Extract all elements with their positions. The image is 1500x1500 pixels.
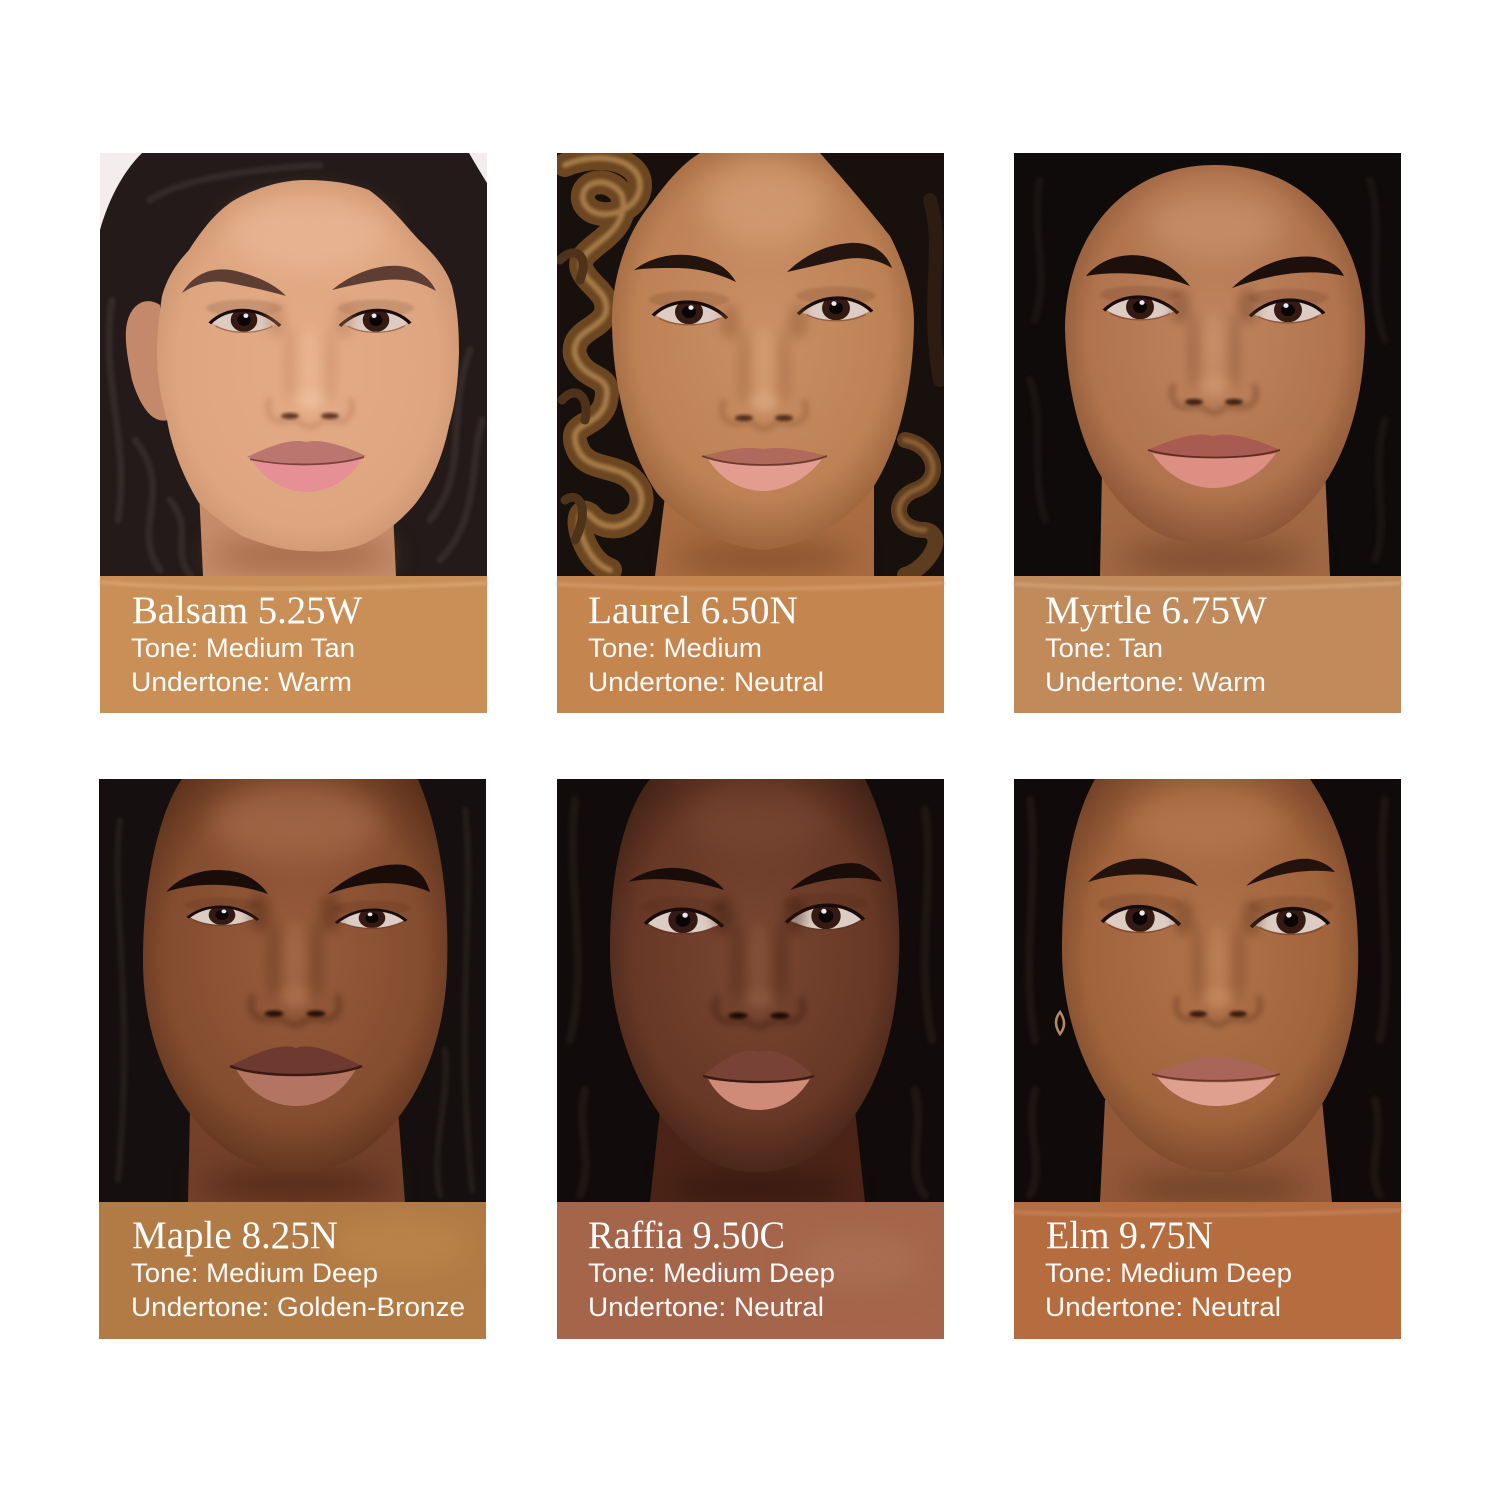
- undertone: Undertone: Golden-Bronze: [131, 1292, 465, 1322]
- swatch: Laurel: [557, 576, 944, 713]
- swatch: Maple: [99, 1202, 486, 1339]
- shade name: Elm 9.75N: [1046, 1214, 1213, 1257]
- shade name: Maple 8.25N: [132, 1214, 338, 1257]
- shade name: Myrtle 6.75W: [1045, 589, 1267, 632]
- shade name: Laurel 6.50N: [588, 589, 798, 632]
- portrait: Elm: [1014, 779, 1401, 1202]
- tone: Tone: Medium: [588, 633, 762, 663]
- panel: Laurel 6.50N: [557, 153, 944, 713]
- undertone: Undertone: Warm: [1045, 667, 1266, 697]
- panel: Myrtle 6.75W: [1014, 153, 1401, 713]
- undertone: Undertone: Neutral: [588, 667, 824, 697]
- panel: Raffia 9.50C: [557, 779, 944, 1339]
- swatch: Raffia: [557, 1202, 944, 1339]
- undertone: Undertone: Neutral: [1045, 1292, 1281, 1322]
- swatch: Elm: [1014, 1202, 1401, 1339]
- undertone: Undertone: Neutral: [588, 1292, 824, 1322]
- tone: Tone: Medium Tan: [131, 633, 355, 663]
- tone: Tone: Medium Deep: [588, 1258, 835, 1288]
- panel: Elm 9.75N: [1014, 779, 1401, 1339]
- portrait: Balsam: [100, 153, 487, 576]
- undertone: Undertone: Warm: [131, 667, 352, 697]
- portrait: Raffia: [557, 779, 944, 1202]
- swatch: Myrtle: [1014, 576, 1401, 713]
- tone: Tone: Medium Deep: [131, 1258, 378, 1288]
- shade name: Raffia 9.50C: [588, 1214, 785, 1257]
- portrait: Maple: [99, 779, 486, 1202]
- tone: Tone: Tan: [1045, 633, 1163, 663]
- portrait: Laurel: [557, 153, 944, 576]
- panel: Maple 8.25N: [99, 779, 486, 1339]
- tone: Tone: Medium Deep: [1045, 1258, 1292, 1288]
- swatch: Balsam: [100, 576, 487, 713]
- panel: Balsam 5.25W: [100, 153, 487, 713]
- portrait: Myrtle: [1014, 153, 1401, 576]
- shade name: Balsam 5.25W: [132, 589, 362, 632]
